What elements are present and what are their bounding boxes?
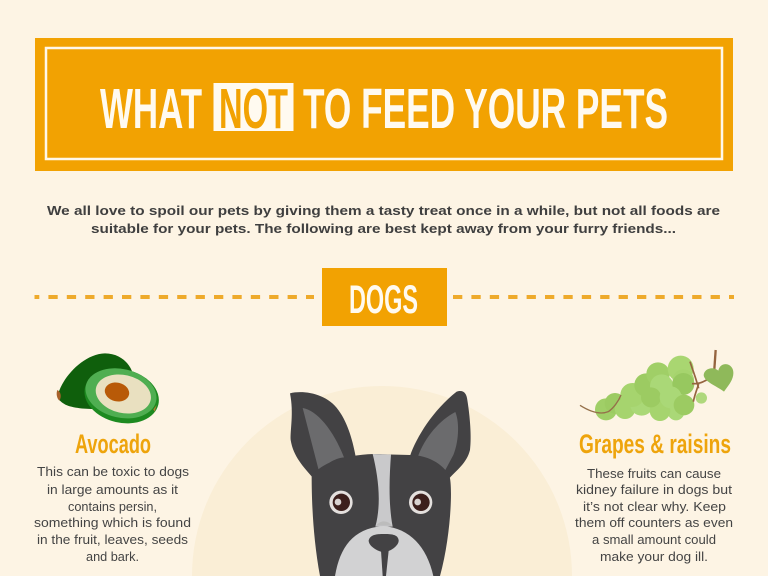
title banner — [35, 38, 733, 171]
text: grapes and raisins: a small amount could — [592, 532, 716, 547]
text: grapes and raisins: it’s not clear why. Keep — [583, 499, 726, 514]
text: grapes and raisins: make your dog ill. — [600, 549, 708, 564]
title: what: WHAT — [100, 77, 202, 141]
background circle — [192, 386, 572, 576]
section divider: dogs — [34, 268, 734, 326]
icon: dog — [290, 391, 471, 576]
text: avocado: something which is found — [34, 515, 191, 530]
text: grapes and raisins: kidney failure in dogs but — [576, 482, 732, 497]
text: avocado: contains persin, — [68, 499, 157, 514]
text: avocado — [34, 464, 191, 564]
text: grapes and raisins: them off counters as even — [575, 515, 733, 530]
intro text: We all love to spoil our pets by giving them a tasty treat once in a while, but not all foods are — [47, 203, 720, 218]
text: grapes and raisins — [575, 466, 733, 564]
text: avocado: This can be toxic to dogs — [37, 464, 190, 479]
text: avocado: in large amounts as it — [47, 482, 178, 497]
icon: avocado — [57, 353, 164, 430]
icon: grapes — [580, 350, 733, 421]
text: avocado: and bark. — [86, 549, 139, 564]
section heading: dogs: DOGS — [349, 278, 418, 322]
intro text — [47, 203, 720, 236]
text: grapes and raisins: These fruits can cause — [587, 466, 721, 481]
heading: avocado: Avocado — [75, 429, 151, 459]
title: not box — [214, 77, 294, 141]
text: avocado: in the fruit, leaves, seeds — [37, 532, 189, 547]
title: not box: NOT — [219, 77, 288, 141]
intro text: suitable for your pets. The following are best kept away from your furry friends... — [91, 221, 676, 236]
